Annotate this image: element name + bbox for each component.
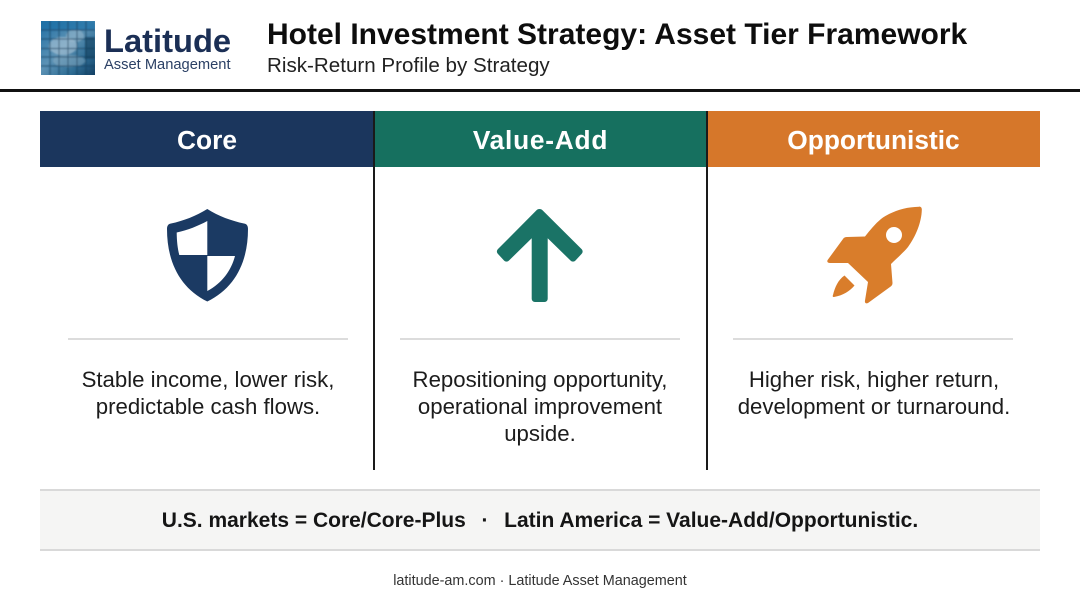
text: opportunistic description — [738, 367, 1010, 419]
logo subtitle: Asset Management — [104, 57, 231, 73]
callout: market summary: U.S. markets = Core/Core-Plus · Latin America = Value-Add/Opportunistic. — [162, 509, 918, 532]
logo wordmark: Latitude — [104, 22, 231, 59]
header rule — [0, 89, 1080, 92]
subtitle: Risk-Return Profile by Strategy — [267, 54, 550, 76]
logo image: glass building — [41, 21, 95, 75]
text: value-add description: upside. — [504, 421, 576, 446]
text: core description — [82, 367, 334, 419]
logo — [41, 21, 231, 75]
panel: core header — [40, 111, 374, 167]
callout: market summary — [40, 489, 1040, 551]
text: core description: Stable income, lower risk, — [82, 367, 334, 392]
text: value-add description: operational improvement — [418, 394, 662, 419]
panel: core header: Core — [177, 125, 237, 155]
icon: up arrow — [496, 209, 583, 302]
panel: opportunistic header — [707, 111, 1040, 167]
title: Hotel Investment Strategy: Asset Tier Framework — [267, 18, 967, 51]
panel: opportunistic header: Opportunistic — [787, 125, 960, 155]
text: opportunistic description: Higher risk, higher return, — [749, 367, 999, 392]
panel: value-add header — [374, 111, 707, 167]
text: core description: predictable cash flows. — [96, 394, 320, 419]
icon: rocket flame — [833, 276, 854, 297]
icon: rocket — [827, 206, 922, 304]
text: opportunistic description: development or turnaround. — [738, 394, 1010, 419]
footer: latitude-am.com · Latitude Asset Management — [393, 573, 687, 589]
icon: shield — [167, 209, 248, 302]
text: value-add description — [413, 367, 667, 446]
text: value-add description: Repositioning opportunity, — [413, 367, 667, 392]
panel: value-add header: Value-Add — [473, 125, 608, 155]
